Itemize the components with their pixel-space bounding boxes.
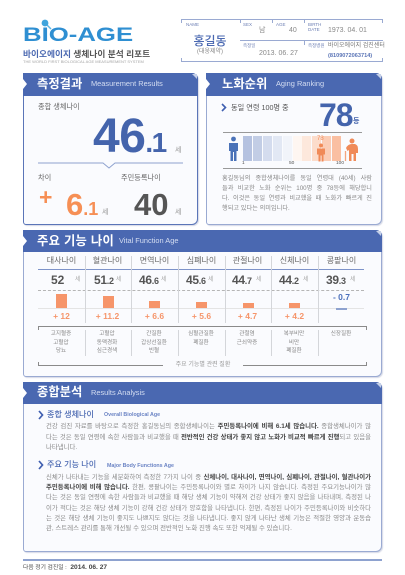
panel: vital function age (23, 230, 382, 377)
related diseases: 폐질환 (193, 340, 209, 346)
header fold (376, 231, 381, 236)
age values: 세 (116, 277, 122, 283)
deltas: + 4.7 (238, 311, 257, 321)
label same age group: 동일 연령 100명 중 (231, 102, 289, 112)
label measurement date: 측정일 (243, 43, 255, 48)
header: aging ranking (206, 73, 382, 96)
icon: elderly person (344, 138, 358, 161)
age values: 39.3 (326, 273, 346, 287)
major functions text (46, 474, 371, 532)
next checkup date: 다음 정기 검진일 : 2014. 06. 27 (23, 564, 107, 571)
top bracket (181, 19, 383, 23)
bottom bracket left (38, 362, 163, 366)
deltas: + 6.6 (145, 311, 164, 321)
age values: 세 (350, 277, 356, 283)
heading english: Aging Ranking (276, 79, 324, 88)
age value: 40 (289, 27, 297, 34)
axis labels: 1 (242, 161, 245, 166)
chart rules (223, 132, 362, 169)
label age: AGE (276, 22, 286, 27)
header notch (23, 79, 27, 89)
header fold (376, 74, 381, 79)
age values: 세 (303, 277, 309, 283)
related diseases: 근쇠약증 (237, 340, 257, 346)
deltas: + 11.2 (96, 311, 119, 321)
icon: current rank person (317, 144, 325, 162)
heading english: Vital Function Age (119, 236, 178, 245)
age values: 45.6 (186, 273, 206, 287)
related diseases: 복부비만 (284, 331, 304, 337)
related diseases: 관절염 (239, 331, 255, 337)
icon: young person (229, 136, 238, 161)
birth date value: 1973. 04. 01 (328, 27, 367, 34)
label total biological age: 종합 생체나이 (38, 102, 80, 111)
patient info box (181, 19, 385, 62)
subheading english overall biological age: Overall Biological Age (104, 412, 160, 418)
column headers: 혈관나이 (93, 256, 122, 265)
logo (23, 20, 150, 64)
related diseases: 심근경색 (97, 348, 117, 354)
related diseases: 간질환 (146, 331, 162, 337)
header fold (192, 74, 197, 79)
related diseases: 당뇨 (56, 348, 66, 354)
deltas: + 5.6 (192, 311, 211, 321)
age values: 44.2 (279, 273, 299, 287)
logo subtitle: 바이오에이지 생체나이 분석 리포트 (23, 49, 150, 59)
ranking description: 홍길동님의 종합생체나이를 동일 연령대 (40세) 사람 (222, 175, 372, 182)
label difference: 차이 (38, 173, 51, 182)
column ticks (240, 20, 305, 45)
heading: 주요 기능 나이 (37, 234, 114, 248)
sex value: 남 (259, 27, 265, 34)
unit: 세 (175, 209, 181, 216)
divider with notch (38, 162, 183, 168)
major functions text: 는 것은 해당 생체 기능이 좋지도 나쁘지도 않다는 것을 나타냅니다. 좋지 않게 나타난 생체 기능은 적절한 영양과 운동습 (46, 515, 371, 522)
subheading overall biological age: 종합 생체나이 (47, 410, 94, 419)
column headers: 관절나이 (233, 256, 262, 265)
ranking description: 들과 비교한 노화 순위는 100명 중 78등에 해당합니 (222, 185, 372, 192)
subheading major body functions age: 주요 기능 나이 (47, 460, 96, 469)
major functions text: 관, 스트레스 관리를 통해 개선될 수 있으며 전반적인 노화 진행 속도 또한 억제될 수 있습니다. (46, 525, 292, 532)
patient name: 홍길동 (193, 34, 227, 48)
hospital value: 바이오에이지 검진센터 (328, 43, 385, 49)
related diseases: 동맥경화 (97, 340, 117, 346)
label resident age: 주민등록나이 (121, 173, 161, 182)
deltas: + 4.2 (285, 311, 304, 321)
header rule (38, 269, 364, 270)
major functions text: 주민등록나이에 비해 많습니다. 한편, 콩팥나이는 주민등록나이와 별로 차이가 나지 않습니다. 측정된 주요기능나이가 많 (46, 484, 371, 491)
age values: 세 (75, 277, 81, 283)
rank marker 78: 78 (317, 136, 324, 142)
age values: 52 (51, 273, 64, 287)
bottom bracket (181, 58, 383, 62)
related diseases: 비만 (289, 340, 299, 346)
company: (대웅제약) (197, 49, 223, 55)
related diseases: 빈혈 (149, 348, 159, 354)
panel: measurement results (23, 73, 198, 225)
column headers: 신체나이 (280, 256, 309, 265)
ranking description: 다. 이것은 동일 연령과 비교했을 때 노화가 빠르게 진 (222, 195, 372, 202)
related diseases (51, 330, 352, 354)
header fold (376, 383, 381, 388)
header: vital function age (23, 230, 382, 252)
chevron icon (222, 103, 226, 112)
axis labels: 100 (336, 161, 344, 166)
column headers: 대사나이 (47, 256, 76, 265)
value 6.1: 6.1 (66, 186, 98, 222)
major functions text: 다는 것은 동일 연령에 속한 사람들과 비교했을 때 해당 생체 기능이 약해져 건강 상태가 좋지 않음을 나타내며, 측정된 나 (46, 494, 371, 501)
header notch (23, 236, 27, 246)
unit: 세 (102, 209, 108, 216)
unit: 세 (175, 147, 181, 154)
header notch (23, 388, 27, 398)
age values: 세 (161, 277, 167, 283)
rank unit: 등 (353, 118, 359, 125)
major functions text: 신체가 나타내는 기능을 세분화하여 측정한 7가지 나이 중 신체나이, 대사나이, 면역나이, 심폐나이, 관절나이, 혈관나이가 (46, 474, 371, 481)
measurement date value: 2013. 06. 27 (259, 50, 298, 57)
logo tagline: THE WORLD FIRST BIOLOGICAL AGE MEASUREMENT SYSTEM (23, 59, 144, 64)
heading: 측정결과 (37, 76, 82, 90)
deltas: + 12 (53, 311, 70, 321)
related diseases: 심혈관질환 (188, 331, 214, 337)
deltas: - 0.7 (333, 292, 350, 302)
axis labels (242, 161, 344, 166)
label hospital: 측정병원 (308, 43, 325, 48)
patient id: (8109072063714) (328, 53, 372, 59)
bar chart (56, 294, 347, 310)
ranking description (222, 174, 372, 212)
related diseases: 고지혈증 (51, 331, 71, 337)
ranking description: 행되고 있다는 의미입니다. (222, 205, 290, 212)
heading: 종합분석 (37, 385, 82, 399)
bracket caption: 주요 기능별 관련 질환 (176, 362, 230, 368)
rank value: 78 (319, 96, 353, 132)
column headers (47, 256, 356, 265)
chevron icon (38, 410, 44, 420)
age values: 44.7 (232, 273, 252, 287)
header: results analysis (23, 382, 382, 404)
age values: 51.2 (94, 273, 114, 287)
heading: 노화순위 (222, 76, 267, 90)
age values: 세 (208, 277, 214, 283)
logo dot with connector (42, 20, 52, 30)
header: measurement results (23, 73, 198, 96)
related diseases: 갑상선질환 (141, 340, 167, 346)
footer rule (23, 559, 382, 560)
column headers: 심폐나이 (187, 256, 216, 265)
middle rule (240, 40, 383, 41)
label birth date: BIRTH DATE (308, 22, 321, 32)
panel: results analysis (23, 382, 382, 552)
column separators (85, 256, 319, 356)
deltas (53, 292, 350, 321)
overall age text: 나타냅니다. (46, 444, 77, 451)
dashed rule (38, 290, 364, 291)
column headers: 콩팥나이 (327, 256, 356, 265)
chevron icon (38, 460, 44, 470)
heading english: Measurement Results (91, 79, 163, 88)
age values (51, 273, 356, 287)
axis labels: 50 (289, 161, 294, 166)
age values: 세 (256, 277, 262, 283)
header notch (206, 79, 210, 89)
related diseases: 신장질환 (331, 331, 351, 337)
panel: aging ranking (206, 73, 382, 225)
overall age text: 건강 검진 자료를 바탕으로 측정한 홍길동님의 종합생체나이는 주민등록나이에 비해 6.1세 많습니다. 종합생체나이가 많 (46, 423, 371, 430)
baseline (38, 308, 364, 309)
big value 46.1: 46.1 (93, 110, 166, 163)
column headers: 면역나이 (140, 256, 169, 265)
heading english: Results Analysis (91, 388, 145, 397)
value 40: 40 (134, 186, 168, 222)
plus sign: + (39, 184, 52, 210)
related diseases: 고혈압 (99, 331, 115, 337)
major functions text: 이가 적다는 것은 해당 생체 기능이 강해 건강 상태가 양호함을 나타냅니다. 한편, 측정된 나이가 주민등록나이와 비슷하다 (46, 505, 371, 512)
label name: NAME (186, 22, 199, 27)
top bracket (38, 326, 367, 330)
ranking chart (223, 132, 362, 169)
overall age text (46, 422, 371, 451)
bottom bracket right (243, 362, 367, 366)
logo wordmark BIO-AGE: BIO-AGE (23, 24, 133, 46)
subheading english major body functions age: Major Body Functions Age (107, 463, 174, 469)
label sex: SEX (243, 22, 252, 27)
overall age text: 다는 것은 동일 연령에 속한 사람들과 비교했을 때 전반적인 건강 상태가 좋지 않고 노화가 비교적 빠르게 진행되고 있음을 (46, 434, 371, 440)
ranking bars (243, 136, 341, 161)
related diseases: 폐질환 (286, 348, 302, 354)
age values: 46.6 (139, 273, 159, 287)
related diseases: 고혈압 (53, 340, 69, 346)
